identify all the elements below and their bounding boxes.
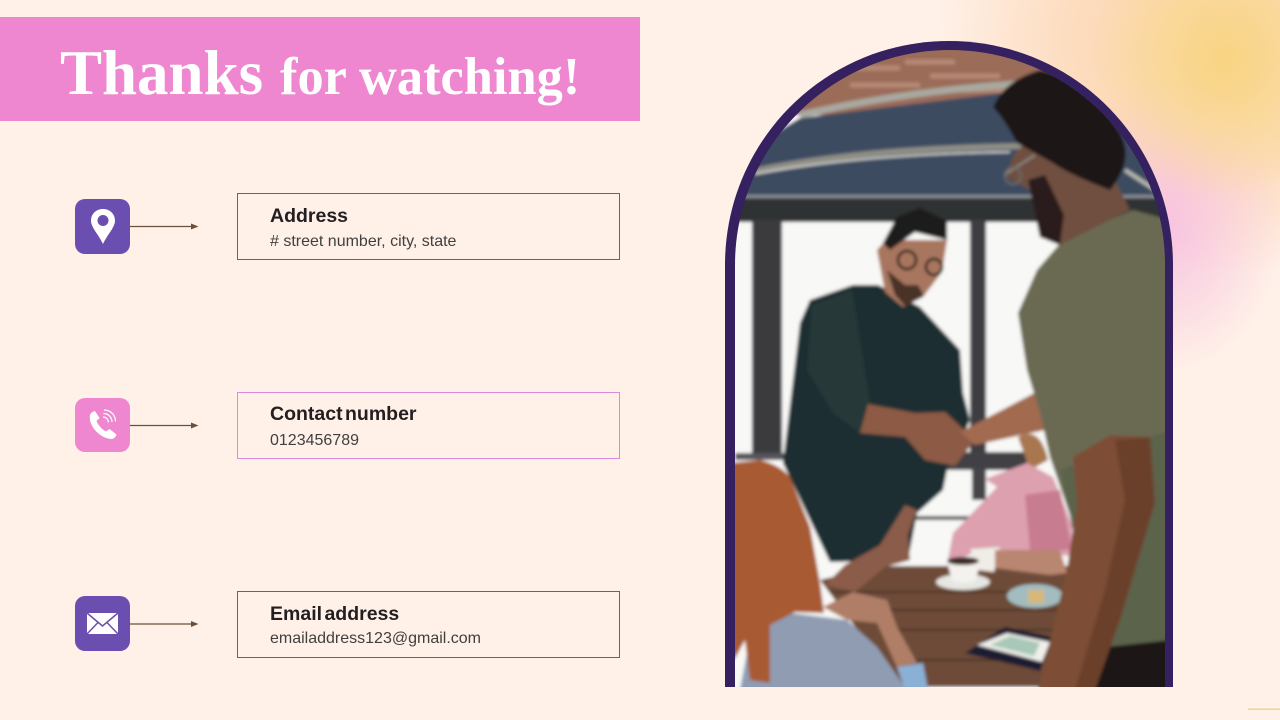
panel: address	[237, 193, 620, 260]
panel: address: Address	[270, 205, 348, 227]
title: for watching!	[280, 48, 580, 106]
coffee cup and saucer	[936, 574, 990, 590]
table	[820, 566, 1075, 687]
woman with red hair	[740, 613, 907, 690]
panel: contact number: Contact number	[270, 403, 417, 425]
arch frame	[725, 41, 1173, 687]
title	[60, 38, 580, 108]
title banner	[0, 17, 640, 121]
man with dark shirt	[783, 285, 970, 562]
brick wall	[794, 50, 1099, 118]
plate with cake	[1007, 584, 1063, 608]
panel: contact number	[237, 392, 620, 459]
head of man with olive shirt	[1005, 144, 1131, 245]
tablet	[965, 627, 1052, 671]
title: Thanks	[60, 38, 263, 108]
man with olive shirt	[1092, 638, 1165, 687]
panel: contact number: 0123456789	[270, 432, 359, 448]
icon: envelope with arrow	[75, 596, 198, 651]
panel: email address	[237, 591, 620, 658]
panel: address: # street number, city, state	[270, 232, 456, 250]
woman in pink	[1018, 434, 1048, 470]
head of man with dark shirt	[877, 240, 947, 307]
icon: phone with arrow	[75, 398, 198, 452]
bottom-right accent line	[1248, 708, 1280, 710]
icon: location pin with arrow	[75, 199, 198, 254]
panel: email address: emailaddress123@gmail.com	[270, 630, 481, 646]
window frame	[730, 198, 1170, 222]
photo: handshake in arched frame	[725, 41, 1280, 710]
panel: email address: Email address	[270, 603, 399, 625]
blue ceiling	[746, 92, 1154, 198]
